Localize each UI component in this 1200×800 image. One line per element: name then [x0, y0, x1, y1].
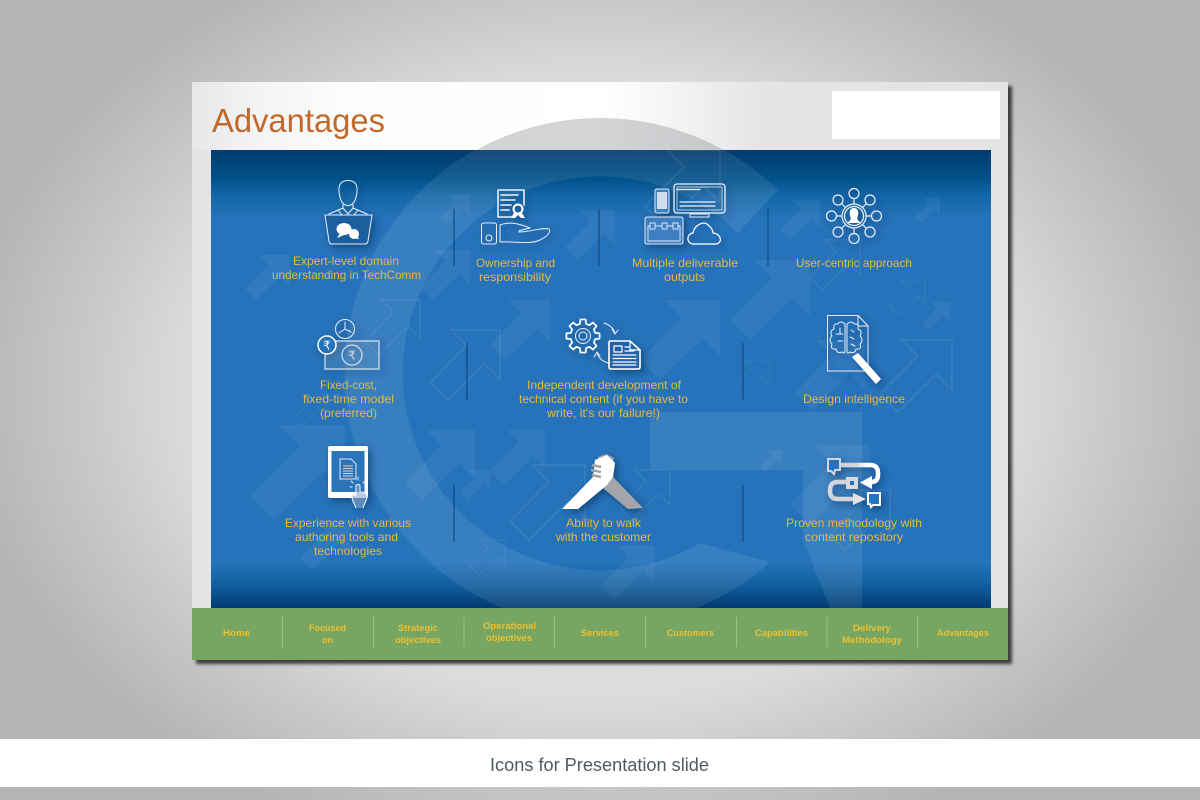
logo watermark on panel — [344, 150, 862, 608]
label: write, it's our failure!) — [546, 406, 660, 420]
footer navigation bar: Home — [223, 628, 250, 639]
label: Design intelligence — [803, 392, 905, 406]
footer navigation bar: Capabilities — [755, 628, 808, 639]
label: (preferred) — [320, 406, 377, 420]
label: Ownership and — [476, 256, 555, 270]
dividers — [454, 209, 768, 542]
item: user-centric approach — [796, 188, 912, 270]
footer navigation bar: Advantages — [937, 628, 989, 639]
icon: rupee note and clock — [318, 320, 379, 369]
item: experience with authoring tools — [285, 446, 411, 558]
label — [632, 256, 738, 284]
label — [519, 378, 688, 420]
label: outputs — [664, 270, 705, 284]
item: independent development of technical content — [519, 319, 688, 420]
icon: workflow arrows — [828, 459, 880, 507]
footer navigation bar: objectives — [395, 635, 441, 646]
item: design intelligence — [803, 316, 905, 406]
footer navigation bar: Operational — [483, 621, 536, 632]
footer navigation bar: on — [322, 635, 333, 646]
title: Advantages — [212, 102, 385, 139]
slide shadow — [196, 86, 1012, 664]
icon: brain on document with pen — [828, 316, 881, 384]
blue content panel — [211, 150, 991, 608]
label: understanding in TechComm — [272, 268, 421, 282]
icon: tablet with touch gesture — [328, 446, 368, 508]
caption text: Icons for Presentation slide — [490, 754, 709, 775]
footer navigation bar: Customers — [667, 628, 714, 639]
label: Expert-level domain — [293, 254, 399, 268]
slide — [192, 82, 1008, 660]
icon: user hub network — [826, 188, 882, 244]
icon: rupee note and clock: ₹ — [348, 348, 356, 362]
label: Experience with various — [285, 516, 411, 530]
label: content repository — [805, 530, 903, 544]
label: responsibility — [479, 270, 551, 284]
footer navigation bar: Delivery — [853, 623, 892, 634]
label: Ability to walk — [566, 516, 642, 530]
item: expert-level domain understanding — [272, 180, 421, 282]
slide header band — [192, 82, 1008, 660]
label — [285, 516, 411, 558]
label: Proven methodology with — [786, 516, 922, 530]
logo placeholder box — [832, 91, 1000, 139]
label: Fixed-cost, — [320, 378, 377, 392]
label — [476, 256, 555, 284]
label — [303, 378, 394, 420]
label: Multiple deliverable — [632, 256, 738, 270]
icon: arm-wrestle handshake — [562, 454, 643, 509]
label: User-centric approach — [796, 256, 912, 270]
icon: certificate over hand — [482, 190, 550, 244]
icon: devices and cloud — [645, 184, 725, 244]
label — [786, 516, 922, 544]
footer navigation bar — [192, 608, 1008, 660]
footer navigation bar: Focused — [309, 623, 346, 634]
item: ownership and responsibility — [476, 190, 555, 284]
item: fixed-cost fixed-time model — [303, 320, 394, 420]
icon: rupee note and clock: ₹ — [323, 338, 331, 352]
caption strip — [0, 739, 1200, 787]
icon: gear and document — [566, 319, 640, 369]
label: technologies — [314, 544, 382, 558]
label: technical content (if you have to — [519, 392, 688, 406]
footer navigation bar: Methodology — [842, 635, 903, 646]
item: multiple deliverable outputs — [632, 184, 738, 284]
label: Independent development of — [527, 378, 682, 392]
logo watermark on header — [476, 118, 724, 150]
label: fixed-time model — [303, 392, 394, 406]
footer navigation bar: objectives — [486, 633, 532, 644]
label — [272, 254, 421, 282]
icon: person with laptop — [325, 180, 372, 244]
label — [555, 516, 651, 544]
item: proven methodology with content repository — [786, 459, 922, 544]
label: authoring tools and — [295, 530, 398, 544]
item: ability to walk with the customer — [555, 454, 651, 544]
footer navigation bar: Strategic — [398, 623, 438, 634]
background arrows — [245, 150, 952, 600]
label: with the customer — [555, 530, 651, 544]
footer navigation bar: Services — [581, 628, 619, 639]
